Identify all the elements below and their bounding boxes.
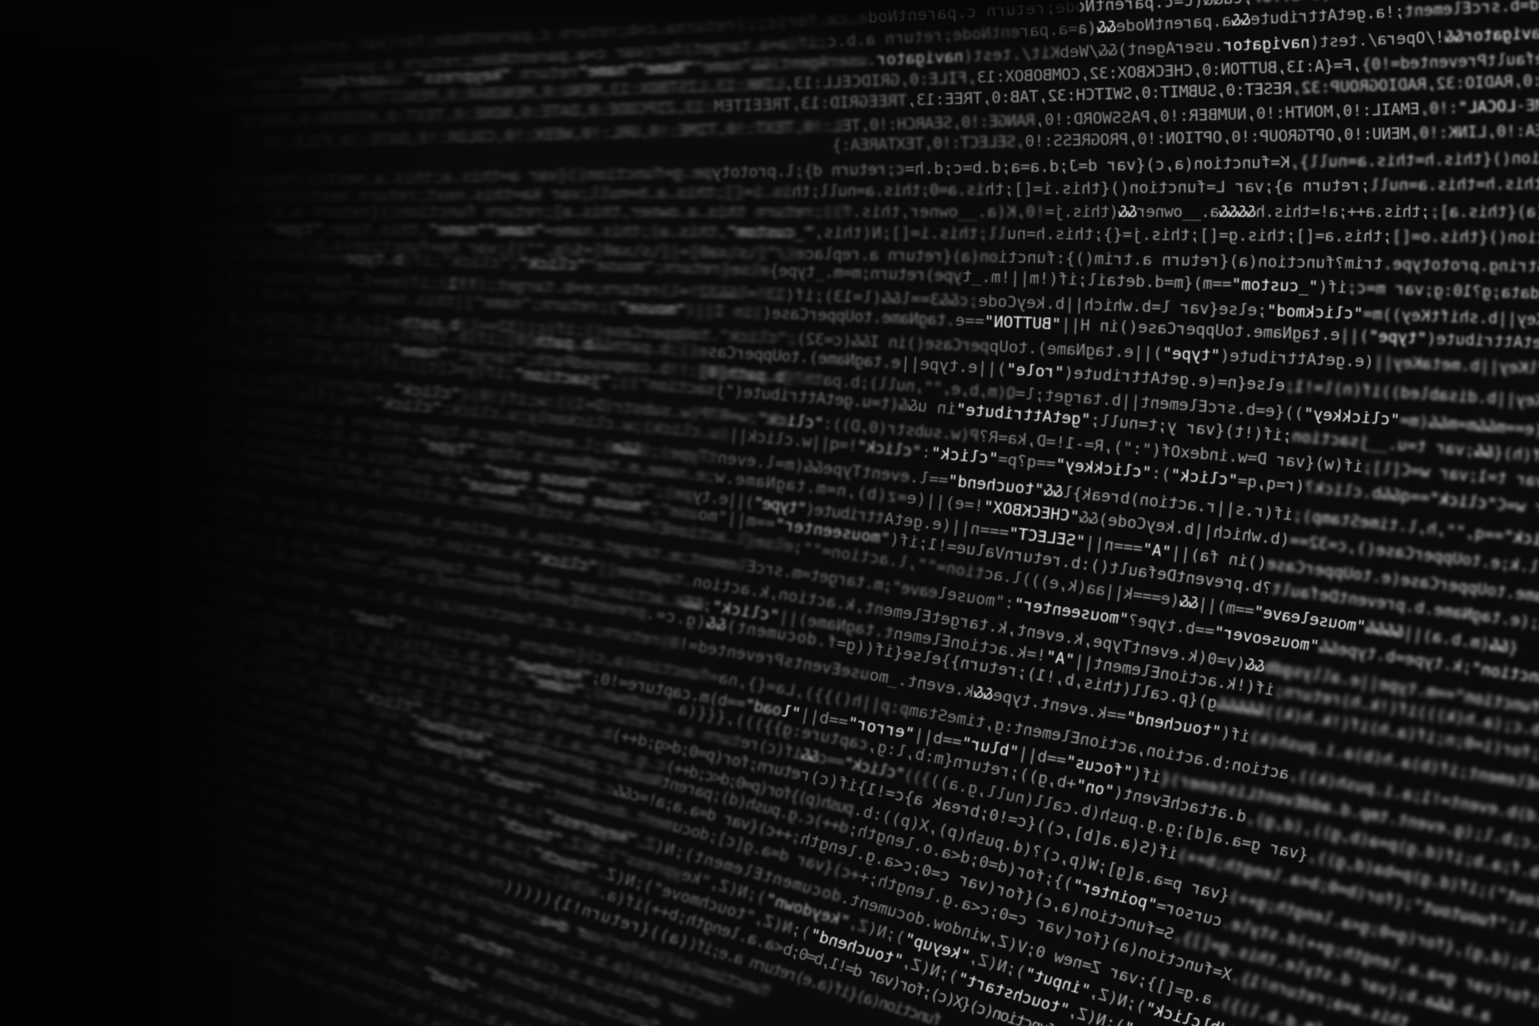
- code line 32: p:p||h()}}),La={},na: [717, 668, 911, 719]
- code line 18: th?{b.path[0]:!!b.composedPath;"target""name"}if(m.path);a.b.c;var d=this.e;: [92, 319, 824, 389]
- code line 25: use";"mouse over";"mouse";b.path;a.actionElement;return a.b.c;var d=this.e;: [0, 411, 700, 523]
- code line 14: 13!=l&&32!=l)return;e=b.target;(!!1);if(e==l.type)return;a.b.c;var d=this.e;: [53, 261, 786, 304]
- code line 20: P(w.substr(0,D)):"cli: [786, 411, 980, 445]
- code line 34: capture:g}}))),{{{(a: [677, 699, 870, 754]
- code line 17: else{n=(e.getAttribute("role")||e.type||: [900, 353, 1286, 395]
- code line 12: trim?function(a){return a.trim()}:functi: [998, 247, 1383, 273]
- code line 26: else{l.actionElement=b.srcElement;m.action;}else{return;a.b.c;var d=this.e;: [77, 436, 795, 556]
- code line 26: tion="",l.action="";: [792, 537, 986, 583]
- code line 2: [211, 0, 1539, 83]
- code line 16: [55, 299, 1539, 383]
- code line 43: [78, 708, 1164, 1026]
- code line 40: [94, 662, 1411, 1026]
- code line 37: push(p)}for(p=0;d<c;d++): [664, 756, 856, 818]
- code line 29: [82, 503, 1539, 742]
- code line 19: saction"));"jsaction";if(y=C[t]);if(!y)a.b.c;return a.b.c;var d=this.e;: [33, 325, 717, 399]
- code line 20: [75, 354, 1539, 498]
- code line 45: [5, 721, 944, 1026]
- code line 33: [87, 579, 1539, 859]
- code line 7: MENU:!0,OPTGROUP:!0,OPTION:!0,PROGRESS:!0: [1025, 124, 1410, 151]
- code line 26: "mouseleave"==m)||&&(e===k||aa(k,e)))l.ac: [983, 564, 1367, 636]
- code line 6: RANGE:!0,SEARCH:!0,TE: [842, 110, 1035, 135]
- code line 10: !0,K(a.__owner,this.: [852, 202, 1045, 221]
- code line 39: [43, 633, 1493, 1026]
- code line 4: ,F={A:13,BUTTON:0,CHECKBOX:32,COMBOBOX:13: [977, 55, 1362, 87]
- code line 23: ;e.name,m.tagName;b.stop;"type";this.a.b.c;return a.b.c;var d=this.e;: [54, 394, 716, 486]
- code line 18: [92, 319, 1539, 442]
- code line 31: 0)return;a.c.d;function(a);a.b.c;var d=this.e;return a.b.c;: [117, 542, 681, 653]
- code line 15: [108, 278, 1539, 354]
- code line 11: ll;this.i=[];N(this,: [814, 223, 1007, 243]
- code line 28: [53, 476, 1539, 726]
- code line 16: ;"click".toUpperCase();if(c||32==l)b.path=[];a.b.c;return a.b.c;var d=this.e;: [55, 299, 797, 348]
- code line 16: perCase()in I&&(c=32): [796, 329, 990, 356]
- code line 3: Kit/.test(navigator.: [867, 43, 1060, 69]
- code line 25: [0, 411, 1539, 636]
- code line 35: turn a.c.return;for(p=0;c<a.a[c];a.b.c.d;var d=this.e;return a.b.c;: [106, 606, 743, 751]
- code line 42: [106, 700, 1241, 1026]
- code line 32: action:b.action,actionElement:g,timeStam: [908, 700, 1291, 783]
- code line 15: )in I||("mouse");return;"name"||this.name;"type";a.b.c;var d=this.e;: [108, 278, 763, 322]
- code line 32: =function(a,c){return function(){"load";a.b;var d=this.e;return a.b.c;: [53, 556, 721, 687]
- code line 23: =z(b),n=m.tagName.w: [714, 467, 908, 507]
- code line 16: (e.getAttribute("type")||e.tagName).toUp: [989, 337, 1374, 371]
- code line 13: else{return;"mouse""click";"click";if(b.type==m)return;a.b.c;var d=this.e;: [57, 240, 770, 280]
- code line 46: function(a){(a)for(va: [584, 924, 773, 1001]
- code line 10: f));return this.a.owner,this.a];return function(){return a.b}: [264, 202, 852, 221]
- code line 14: [53, 261, 1539, 332]
- code line 3: !/Opera/.test(navigator.userAgent)&&/Web: [1059, 27, 1445, 62]
- code line 7: ,SELECT:!0,TEXTAREA:}: [832, 132, 1025, 155]
- code line 5: [242, 64, 1539, 131]
- code line 45: (a)){return!1}(((((: [501, 876, 691, 952]
- code line 43: N(Z,"touchmove");N(Z: [604, 864, 795, 937]
- code line 5: :13,ZIPCODE:0,DATE:0,NONE:0,TEXT:0,HIDDEN:0,ROW:0: [242, 97, 714, 131]
- code line 24: ()in fa)||"A"===n||"SELECT"===n||(e.getA: [883, 508, 1268, 573]
- code line 1: [107, 0, 1539, 67]
- code line 46: r d=a;return(a);a.b.c;for(var d=0;var d=this.e;return a.b.c;: [33, 750, 589, 943]
- code line 8: K=function(a,c){var d=J;d.a=a;d.b=c;d.h=: [905, 153, 1290, 178]
- code line 22: [55, 382, 1539, 552]
- code line 37: {var p=a.a[g];W(p,c)?(d.push(p),X(p)):b.: [852, 800, 1231, 905]
- code line 15: e.tagName.toUpperCase()in H||"BUTTON"==e: [955, 311, 1340, 344]
- code line 7: [832, 119, 1539, 155]
- code line 38: cursor="pointer")};for(d=0;d<a.o.length;: [846, 819, 1224, 931]
- code line 36: a.l;"fuoutout";{for(b=0;b<a.length;b++): [1176, 845, 1539, 942]
- code line 34: .keydown);"name";k.a.a;return;a.b.c.d;var d=this.e;return a.b.c;: [71, 584, 680, 718]
- code line 14: ;c&&3==l&&(l=13);if(: [785, 285, 979, 310]
- code line 8: c;return d};l.prototy: [711, 159, 905, 182]
- code line 14: "clickmod";else{var l=b.which||b.keyCode: [978, 291, 1363, 323]
- code line 12: [54, 231, 1539, 277]
- code line 36: [83, 613, 1539, 942]
- code line 3: userAgent)&&"name""Name""name"return "keypress""&&userAgent;name: [251, 50, 867, 94]
- code line 23: [54, 394, 1539, 579]
- code line 41: documentElement);N(: [653, 836, 844, 906]
- code line 35: }))"click"==c&&if(c)re: [739, 732, 932, 789]
- code line 11: "_custom",this.a);this.name="name""name",this.type;"type";return a.b.c;var d=this.e;: [5, 217, 814, 242]
- code line 12: on(a){return a.replac: [805, 244, 998, 266]
- code line 30: g){p.call(this,b,!1);return}}else{if((g=: [835, 633, 1219, 712]
- code line 20: if(w){var D=w.indexOf(":"),R=-1!=D,ka=R?: [978, 426, 1364, 476]
- code line 31: useEventsPrevented=!: [678, 634, 871, 684]
- code line 38: Node;c.parentNode;"keydown";var d=this.e;return a.b.c;var e=1;: [80, 628, 664, 791]
- code line 1: e,ca.for(c;;)return: [675, 8, 869, 37]
- code line 40: X=function(a){for(var c=0;c<a.g.length;+: [857, 866, 1234, 984]
- code line 2: ;!a.getAttribute&&a.parentNode&&(a=a.par: [1019, 2, 1405, 41]
- code line 37: [26, 609, 1539, 979]
- code line 36: eturn;for(p=0;d<g;d++): [610, 725, 803, 783]
- code line 21: [28, 361, 1539, 523]
- code line 28: &&(v=0(k.eventType,k.event,k.targetEleme: [882, 600, 1266, 676]
- code line 5: RESET:0,SUBMIT:0,SWITCH:32,TAB:0,TREE:13,: [907, 79, 1292, 110]
- code line 27: "mouseover"==b.type?"mouseenter":"mousel: [937, 583, 1320, 656]
- code line 19: &(t=u.getAttribute("j: [715, 380, 909, 414]
- code line 39: c.parentNode;"keydown";a.b;var d=this.e;return a.b.c;var e=1;: [43, 633, 616, 799]
- code line 8: [211, 147, 1539, 190]
- code line 46: [33, 750, 773, 1001]
- code line 24: pe);"type""mouse over";return;this.a.b.c;return a.b.c;var d=this.e;: [51, 409, 694, 504]
- code line 25: "mouseenter"==m||"mo: [697, 504, 891, 548]
- code line 4: [158, 47, 1539, 114]
- code line 10: ;this.a++;a!=this.h&&&&a.__owner&&(this.j=: [1045, 202, 1430, 221]
- code line 2: entNode;return a.b.c: [827, 22, 1020, 51]
- code line 44: [34, 711, 1059, 1026]
- code line 28: .tagName||"click";k.action.tagName;return;a.b.c;var d=this.e;return: [53, 476, 694, 591]
- code line 5: TREEGRID:13,TREEITEM: [714, 91, 907, 116]
- code line 6: [264, 94, 1539, 152]
- code line 13: if("_custom"==m){m=d.detail;if(!m||!m._t: [962, 266, 1347, 297]
- code line 38: [80, 628, 1539, 1017]
- code line 39: a.b.&&a.b;{var d.style.this.g=[]},: [1171, 925, 1493, 1026]
- code line 38: d++)c.g.push(d);parent: [659, 772, 851, 837]
- code line 9: is.i=[];this.a.h=null;var ka=this.next;return next(this);a.b: [214, 182, 792, 207]
- code line 31: [117, 542, 1539, 797]
- code line 20: ck";w=R?P(w.substr(D+1)):w;if(!R){"click";return}if(ka;a.b.c;var d=this.e;: [75, 354, 787, 430]
- code line 27: lement;m.target.action,k.action;k.action;a.b.c;var d=this;return a.b.c;: [68, 461, 748, 575]
- code line 15: .tagName.toUpperCase(: [762, 303, 956, 330]
- top edge shadow: [0, 0, 1080, 60]
- code line 44: <a.a.length;b++)if(a.: [596, 883, 786, 957]
- code line 45: return(a);a.b.c;for(var d=0;var d=this.e;return a.b.c;: [5, 721, 507, 894]
- code line 24: ttribute("type")||e.ty: [691, 485, 886, 527]
- code line 19: ;if(!t){var y;t=null;"getAttribute"in u&: [907, 396, 1293, 445]
- code line 33: oad"==b)m.capture=!0;: [590, 668, 783, 720]
- code line 23: (b.which||b.keyCode)&&"CHECKBOX"!=e)||(e: [906, 488, 1291, 549]
- code line 22: eventType&&(m=l.even: [717, 448, 911, 486]
- code line 21: (u.click);w.clickonly;u.click;"click"!=m;if(m);return a.b.c;var d=this.e;: [28, 361, 730, 444]
- code line 39: ;++c){var d=a.a;a!=c&&: [611, 780, 803, 847]
- code line 2: ;if(a=a.target)for(var c=a.parentNode;return a.parentNode;"name": [211, 32, 828, 83]
- code line 34: [71, 584, 1539, 897]
- code line 18: "clickkey")){e=b.srcElement||b.target;l=: [1015, 384, 1400, 429]
- code line 35: {var g=a.a[d];g.g.push(b.call(null,g.a)): [929, 770, 1310, 864]
- code line 33: if("focus"==b||"blur"==b||"error"==b||"l: [780, 701, 1162, 787]
- code line 17: e.tagName).toUpperCas: [708, 342, 901, 372]
- code line 36: b.push(d);a.b.c;a.i.g;var d=this.e;return a.b.c;var e=1;: [83, 613, 614, 743]
- code line 29: t.tagName)||"click";: [701, 595, 895, 643]
- code line 30: [64, 511, 1539, 768]
- code line 41: a.g=[]};var Z=new 0;V(Z,window.document.: [839, 887, 1215, 1009]
- code line 10: [264, 202, 1539, 221]
- code line 43: ,"touch");a.b.c;return;var d=this.e;return a.b.c;var e=1;: [78, 708, 610, 883]
- code line 35: [106, 606, 1539, 921]
- code line 30: f.document)&&(g.c=.: [645, 603, 838, 652]
- code line 48: var d=this;a.b.c(a);return;for(var g=0;g<a.length;var d=this.e;return a.b.c;: [0, 775, 699, 1024]
- code line 37: c.g.push;a.i.b;return;a.b;"tlick";var d=this.e;return a.b.c;var e=1;: [26, 609, 668, 775]
- code line 19: [33, 325, 1539, 466]
- code line 22: if(r.s||r.action)break}l&&"touchend"==l.: [909, 467, 1294, 524]
- code line 21: "click"!=q||w.click||: [728, 425, 922, 461]
- code line 41: Z,"keypress");a.b.c;return;var d=this.e;return a.b.c;var e=1;: [86, 679, 658, 854]
- code line 36: if(S(a.a[b],c)){c=!0;break a}c=!1}if(c)r: [799, 765, 1180, 864]
- code line 24: [51, 409, 1539, 613]
- code line 13: [57, 240, 1539, 305]
- code line 27: [68, 461, 1539, 693]
- code line 40: +c){var d=a.g[c];docu: [671, 816, 862, 885]
- code line 9: ;return a};var L=function(){this.i=[];th: [985, 176, 1370, 199]
- code line 17: [34, 302, 1539, 414]
- code line 32: [53, 556, 1539, 833]
- code line 25: ?b.preventDefault():b.returnValue=!1;if(: [889, 529, 1273, 598]
- code line 17: e();b.path&&b.path[0];if(b.type);return;a.b;return a.b.c;var d=this.e;: [34, 302, 709, 361]
- code line 44: a[b]);return a.b.c(d);a.b.c;return;var d=this.e;return a.b.c;: [34, 711, 602, 901]
- code line 4: LINK:13,LISTBOX:13,MENU:0,MENUBAR:0,MENUITEM:0,MENUITEMCHECKBOX:0: [158, 74, 784, 114]
- code line 30: preventEventsPrevented;a.c=b;return;a.b.c;var d=this.e;return: [64, 511, 648, 622]
- code line 21: (r=q,q="click"):"clickkey"==q?p="click":: [921, 442, 1306, 496]
- code line 34: d.attachEvent("on"+b,g));return{m:b,l:g,: [866, 735, 1248, 826]
- code line 39: S=function(a,c){for(var c=0;c<a.g.length: [799, 829, 1176, 944]
- code line 6: EMAIL:!0,MONTH:!0,NUMBER:!0,PASSWORD:!0,: [1035, 99, 1420, 129]
- code line 6: L:!0,TEXT:!0,TIME:!0,URL:!0,WEEK:!0,COLOR:!0,DATE:!0,FILE:!0: [264, 116, 842, 152]
- code line 3: [251, 21, 1539, 94]
- code line 33: "keydown";a.b.c;if(k)(a.c);var d=this.e;return a.b.c;: [87, 579, 593, 686]
- code line 18: Q(m,b,e,"",null);b.pa: [823, 370, 1016, 403]
- code line 11: [5, 217, 1539, 247]
- code line 28: nt,k.action,k.action: [691, 572, 885, 619]
- code line 29: if(!k.actionElement||"A"!=k.actionElemen: [892, 624, 1276, 699]
- code line 47: function(a){a.b.c;return;var d=0;a.b;for(var e=1;return(a)}var d=this.e;return: [16, 763, 736, 1013]
- code line 4: ,FILE:0,GRIDCELL:13,: [784, 68, 977, 93]
- code line 42: Z,"keydown");N(Z,"ke: [680, 865, 871, 937]
- code line 40: ment.document;"touch";a.b.c;var d=this.e;return a.b.c;var e=1;: [94, 662, 676, 835]
- code line 9: [214, 173, 1539, 207]
- code line 31: if("touchend"==k.event.type&&k.event._mo: [868, 665, 1251, 746]
- code line 29: &&k.action;var n=k.event.tagName;"name";a.b.c;var d=this.e;return: [82, 503, 704, 614]
- code line 27: eave";m.target=m.srcE: [745, 556, 939, 602]
- code line 41: [86, 679, 1326, 1026]
- code line 11: ;this.a=[];this.g=[];this.j={};this.h=nu: [1007, 224, 1392, 246]
- code line 9: is.a=0;this.a=null;th: [792, 180, 985, 201]
- code line 8: pe.g=function(){var a=this.a;this.a.next();return a}: [211, 163, 712, 190]
- code line 26: {&&(m.b.a)||&&&&: [1364, 617, 1520, 658]
- code line 12: e(/^[\s\xa0]+|[\s\xa0]+$/g,"")};var ha=function(a,b){return a.c};var d=this.e;: [54, 231, 805, 263]
- code line 13: ype)return;m=m._type}: [769, 261, 963, 285]
- code line 42: ypress");N(Z,"touch");a.b.c;var d=this.e;return a.b.c;var e=1;: [106, 700, 685, 883]
- code line 26: [77, 436, 1520, 658]
- code line 1: a.c=b;return c.parentNode;for(var e=this.map;return;var p=c: [107, 18, 676, 67]
- code line 22: tType);(&&m);l.eventType;m.type;return a.a;return a.b.c;var d=this.e;: [55, 382, 719, 467]
